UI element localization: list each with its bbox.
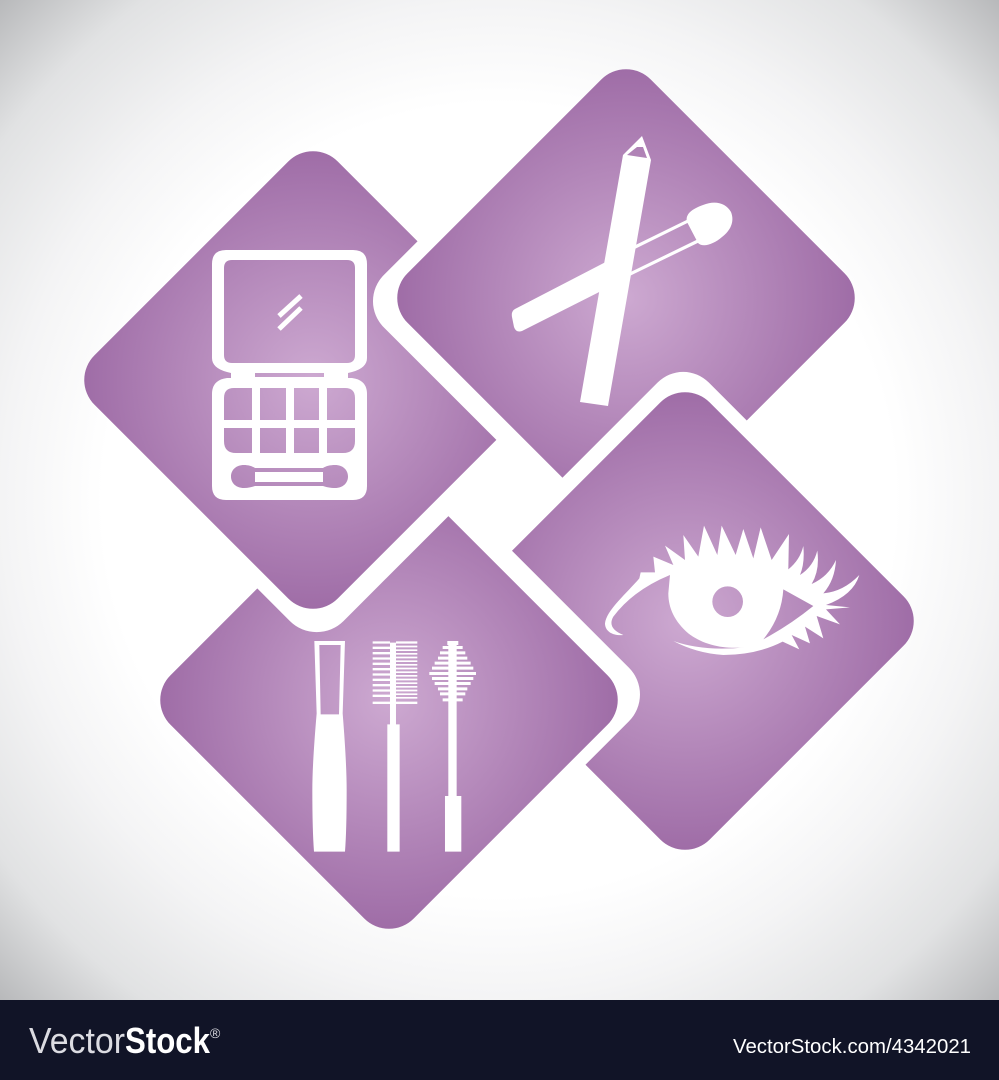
panel shape: applicator diamond — [397, 69, 855, 478]
icon: mascara tube — [312, 641, 347, 852]
icon: mascara tools — [312, 641, 476, 852]
icon: eyeshadow palette — [212, 250, 367, 500]
panel shape: eye diamond — [512, 392, 914, 850]
icon: spiral brush — [429, 641, 476, 852]
footer bar — [0, 1000, 999, 1080]
panel: eye — [512, 392, 914, 850]
logo: VectorStock: ® — [210, 1025, 221, 1041]
panel: pencil and applicator — [397, 69, 855, 478]
logo: VectorStock — [29, 1020, 221, 1061]
panel: mascara — [160, 516, 618, 929]
image id text: VectorStock.com/4342021 — [733, 1036, 971, 1058]
icon: applicator brush — [512, 203, 732, 332]
icon: eye with lashes — [605, 526, 859, 655]
logo: VectorStock: Stock — [125, 1020, 211, 1061]
panel: palette — [84, 151, 496, 609]
logo: VectorStock: Vector — [29, 1020, 125, 1061]
icon: comb brush — [373, 641, 417, 852]
panel shape: mascara diamond — [160, 516, 618, 929]
panel shape: palette diamond — [84, 151, 496, 609]
icon: eye pencil — [580, 136, 651, 406]
